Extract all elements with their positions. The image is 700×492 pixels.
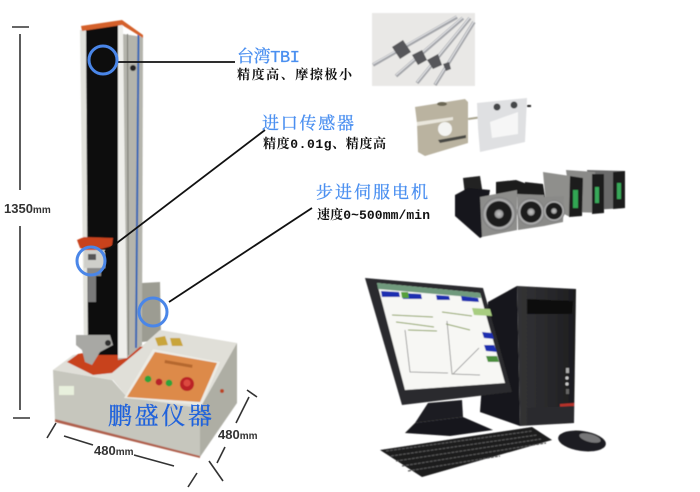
monitor [365,278,512,405]
height dimension [4,27,51,418]
callout circle: sensor [77,247,105,275]
upper grip [84,250,105,302]
depth dimension: 480mm [218,427,258,442]
brand text: 鹏盛仪器 [108,396,212,431]
base [53,330,237,458]
callout circle: motor [139,298,167,326]
label: sensor: 进口传感器 [262,114,354,135]
leader lines [105,62,312,302]
height dimension: 1350mm [4,201,51,216]
label: motor: 步进伺服电机 [316,183,428,204]
computer [365,278,607,477]
testing machine [53,20,237,458]
photo: ball screws [372,13,475,86]
motors [455,176,565,238]
text: motor detail: 速度0~500mm/min [317,207,430,223]
width dimension: 480mm [94,443,134,458]
photo: servo motors and drivers [455,170,625,238]
drivers [543,170,625,217]
text: sensor detail: 精度0.01g、精度高 [263,136,386,152]
tower [480,286,576,426]
buttons [145,376,151,382]
mouse [557,428,607,454]
crosshead [77,237,113,252]
lower grip [76,335,113,365]
photo: load cells [415,98,531,156]
keyboard [380,427,552,477]
control panel [124,349,220,405]
monitor stand [405,400,493,436]
label: TBI: 台湾TBI [237,47,300,68]
motor housing [142,282,161,342]
screen content [377,283,499,375]
depth dimension [209,390,258,481]
column [80,20,143,360]
text: TBI detail: 精度高、摩擦极小 [237,67,353,83]
callout circle: ball screw [89,46,117,74]
width dimension [47,423,197,487]
